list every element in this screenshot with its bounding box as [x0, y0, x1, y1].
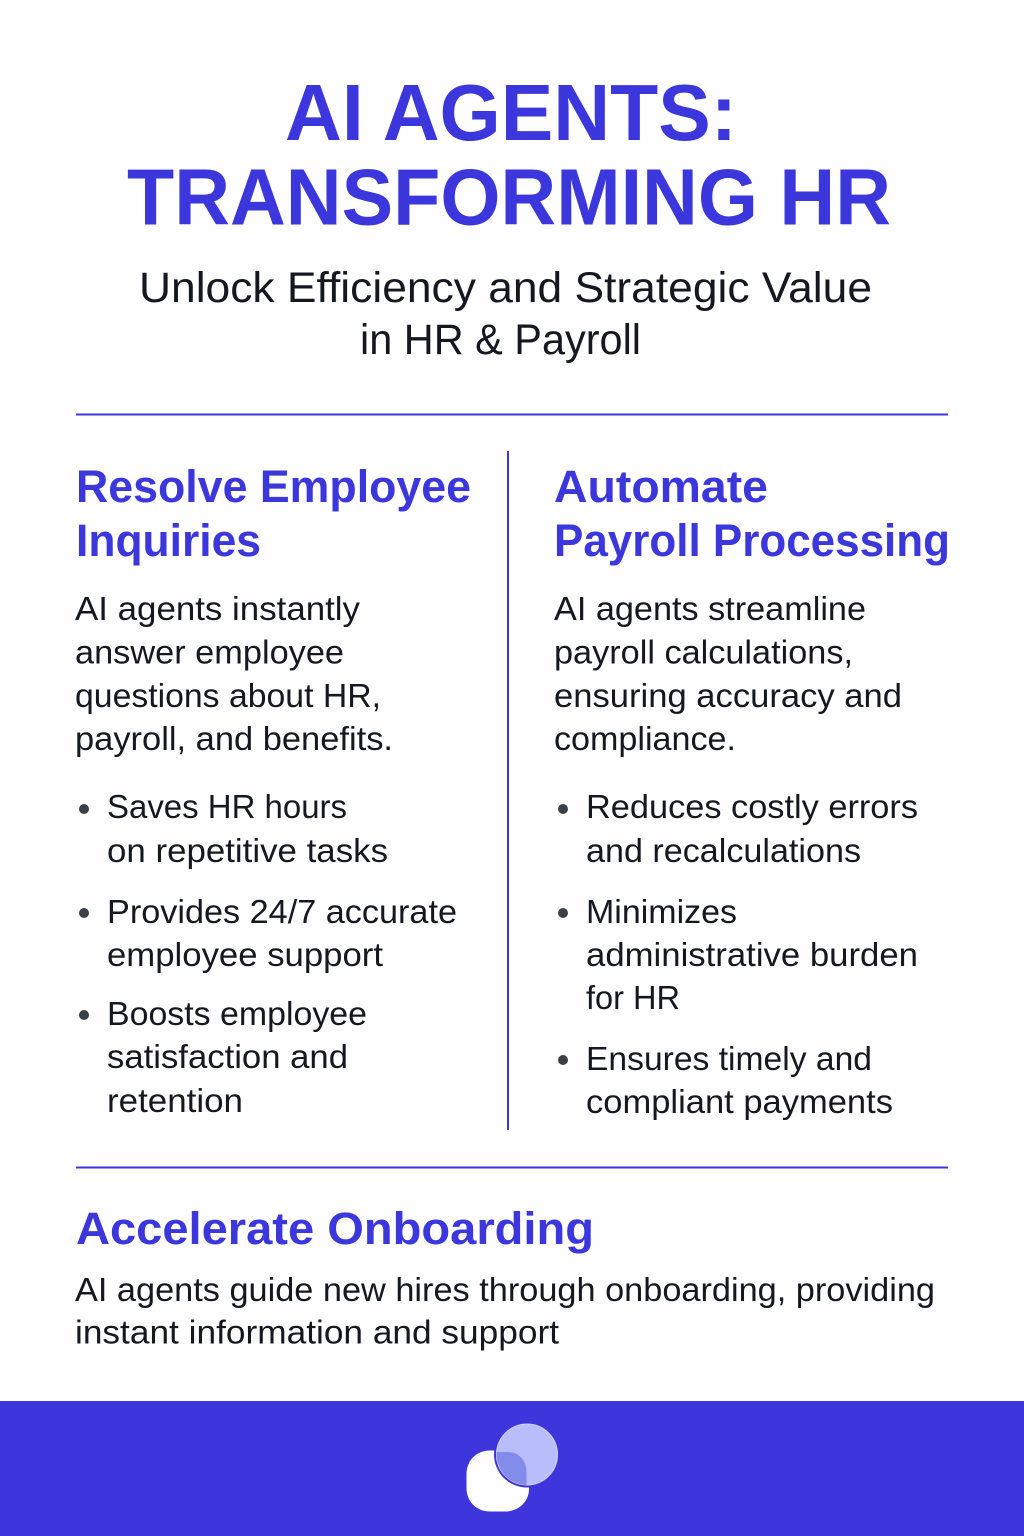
bullet: timely payments: compliant payments — [586, 1083, 893, 1120]
subtitle — [139, 264, 872, 364]
bullet: minimizes burden — [558, 893, 918, 1016]
bullet: satisfaction: retention — [107, 1082, 243, 1119]
footer band — [0, 1401, 1024, 1536]
text: onboarding description — [75, 1271, 935, 1350]
bullet: minimizes burden: for HR — [586, 979, 680, 1016]
heading: automate payroll processing — [554, 461, 950, 566]
bullet: 24/7 support: employee support — [107, 936, 383, 973]
title: TRANSFORMING HR — [127, 152, 891, 242]
bullet: 24/7 support: Provides 24/7 accurate — [107, 893, 457, 930]
heading: accelerate onboarding: Accelerate Onboarding — [76, 1203, 594, 1254]
bullet: reduces errors: Reduces costly errors — [586, 788, 918, 825]
text: resolve description: answer employee — [75, 634, 344, 670]
text: payroll description: payroll calculations, — [554, 634, 853, 670]
title — [127, 68, 891, 242]
bullet: saves hours: on repetitive tasks — [107, 832, 388, 869]
icon: logo — [466, 1422, 560, 1512]
heading: automate payroll processing: Payroll Processing — [554, 515, 950, 566]
text: payroll description: AI agents streamline — [554, 590, 866, 627]
text: payroll description: ensuring accuracy and — [554, 677, 902, 714]
panel: resolve employee inquiries — [75, 461, 471, 1119]
bullet: minimizes burden: Minimizes — [586, 893, 737, 930]
text: payroll description — [554, 590, 902, 757]
bullet: satisfaction: satisfaction and — [107, 1038, 348, 1075]
bullet: 24/7 support — [79, 893, 457, 973]
bullet: reduces errors — [558, 788, 918, 869]
bullet: reduces errors: and recalculations — [586, 832, 861, 869]
bullet: timely payments — [558, 1040, 893, 1120]
text: onboarding description: AI agents guide new hires through onboarding, providing — [75, 1271, 935, 1308]
subtitle: Unlock Efficiency and Strategic Value — [139, 264, 872, 312]
heading: resolve employee inquiries: Resolve Employee — [76, 461, 471, 512]
text: resolve description: payroll, and benefits. — [75, 720, 393, 757]
heading: automate payroll processing: Automate — [554, 461, 768, 512]
bullet: timely payments: Ensures timely and — [586, 1040, 872, 1077]
title: AI AGENTS: — [285, 68, 737, 157]
heading: resolve employee inquiries — [76, 461, 471, 566]
subtitle: in HR & Payroll — [360, 316, 641, 364]
bullet: saves hours — [79, 788, 388, 869]
text: resolve description — [75, 590, 393, 757]
text: onboarding description: instant information and support — [75, 1314, 559, 1350]
text: payroll description: compliance. — [554, 720, 736, 757]
text: resolve description: AI agents instantly — [75, 590, 361, 627]
bullet: saves hours: Saves HR hours — [107, 788, 347, 825]
text: resolve description: questions about HR, — [75, 677, 381, 714]
bullet: satisfaction: Boosts employee — [107, 995, 367, 1032]
heading: resolve employee inquiries: Inquiries — [76, 515, 261, 566]
bullet: satisfaction — [79, 995, 367, 1119]
bullet: minimizes burden: administrative burden — [586, 936, 918, 973]
panel: accelerate onboarding — [75, 1203, 935, 1350]
panel: automate payroll processing — [554, 461, 950, 1120]
